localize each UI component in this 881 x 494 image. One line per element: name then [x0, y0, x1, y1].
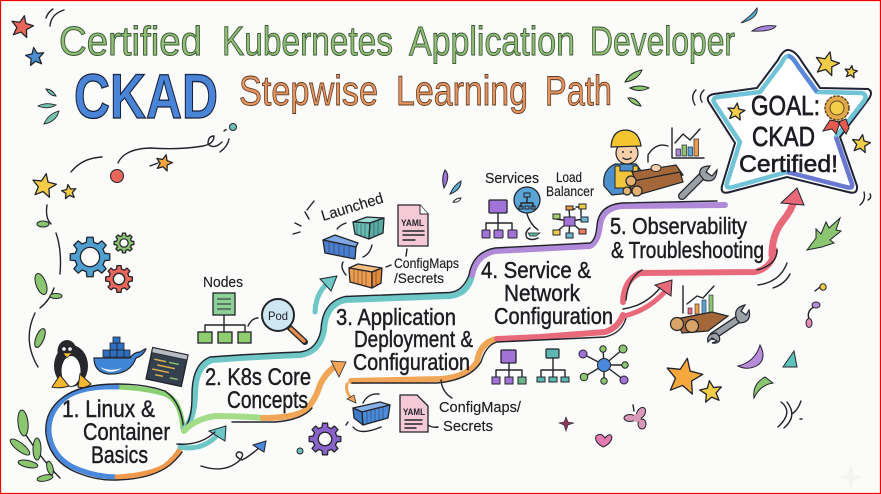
icon: hub network	[579, 345, 628, 384]
heading: stepwise learning path: Stepwise	[239, 67, 378, 114]
icon: pod magnifier: Pod	[268, 309, 288, 323]
step 4 label: Configuration	[494, 303, 613, 329]
step 1 label: 1. Linux &	[62, 396, 155, 423]
label: configmaps secrets	[386, 249, 459, 286]
goal star text	[739, 90, 838, 178]
lower wrench	[708, 305, 750, 343]
path: step 3 orange to step 4 red	[351, 250, 777, 383]
container bottom arrows	[346, 394, 381, 432]
icon: load balancer network	[553, 204, 588, 238]
path: step 1 linux and container basics loop	[46, 384, 184, 480]
icon: teal container	[353, 217, 384, 239]
label: load balancer	[546, 169, 594, 199]
title: certified kubernetes application developer	[59, 18, 735, 64]
title: certified kubernetes application developer: Kubernetes	[222, 18, 393, 64]
network icons step 4	[443, 169, 594, 240]
icon: yaml document	[398, 205, 428, 246]
decorations: top right	[625, 8, 872, 205]
label: load balancer: Balancer	[546, 183, 594, 199]
label: services: Services	[485, 170, 539, 187]
label: configmaps secrets: /Secrets	[394, 270, 444, 286]
lower icons: org charts and hub	[492, 345, 628, 384]
step 5 label: & Troubleshooting	[611, 237, 764, 263]
heading: stepwise learning path	[239, 67, 612, 114]
arrow: small blue squiggle	[201, 441, 266, 469]
step 2 label: Concepts	[227, 387, 308, 414]
title: certified kubernetes application developer: Developer	[590, 18, 735, 64]
step labels	[62, 213, 764, 469]
lower chart	[683, 286, 714, 314]
icon: purple gear	[297, 423, 341, 455]
icon: docker whale	[94, 337, 146, 374]
label: configmaps secrets bottom: Secrets	[443, 418, 493, 435]
lower logs	[670, 312, 728, 333]
icon: growth chart top	[648, 128, 704, 162]
icon: linux penguin	[52, 340, 91, 388]
launched containers cluster	[293, 190, 459, 288]
logs	[623, 165, 683, 196]
heading: stepwise learning path: Learning	[396, 67, 528, 114]
step 1 label	[62, 396, 170, 469]
container arrows	[337, 223, 372, 275]
heading: stepwise learning path: Path	[545, 67, 612, 114]
path: step 2 lower green and orange with arrow	[184, 361, 346, 431]
step 5 label: 5. Observability	[610, 213, 747, 239]
icon: orange arrow down	[347, 384, 356, 403]
icon: gears left	[70, 233, 134, 292]
label: configmaps secrets: ConfigMaps	[394, 255, 459, 271]
icon: blue bottom container	[353, 402, 390, 425]
icon: blue container	[323, 235, 358, 259]
step 4 label	[481, 257, 613, 329]
decorations: top left	[9, 9, 237, 367]
arrow: step 5 to goal	[772, 188, 804, 255]
title: certified kubernetes application developer: Application	[409, 18, 575, 64]
icon: orange container	[349, 264, 382, 288]
step 3 label: Deployment &	[354, 326, 473, 352]
worker hands	[651, 164, 661, 172]
step 3 label: 3. Application	[336, 304, 456, 330]
goal star text: GOAL:	[751, 90, 820, 121]
step 4 label: 4. Service &	[481, 257, 591, 283]
icon: nodes diagram: Nodes	[203, 274, 243, 291]
heading: CKAD: CKAD	[74, 62, 218, 132]
icon: nodes diagram	[198, 274, 251, 343]
goal star text: Certified!	[739, 151, 838, 178]
icon: wrench top	[682, 166, 717, 196]
goal star	[708, 50, 871, 193]
worker body	[604, 164, 642, 195]
step 1 label: Basics	[91, 442, 148, 469]
label: configmaps secrets bottom: ConfigMaps/	[439, 399, 522, 416]
icon: plant bottom left	[8, 410, 60, 483]
step 2 label	[205, 364, 311, 414]
arrow: step 4 to step 5	[623, 280, 672, 316]
step 3 label: Configuration	[353, 349, 470, 375]
icon: teal lower org chart	[537, 349, 569, 382]
decorations: bottom right	[559, 218, 864, 490]
icon: code window	[146, 348, 188, 386]
icon: yaml bottom document	[400, 395, 428, 432]
icon: purple org chart	[482, 200, 517, 238]
icon: pod magnifier	[248, 299, 305, 342]
bottom containers cluster	[346, 380, 522, 435]
step 3 label	[336, 304, 473, 375]
label: launched: Launched	[319, 190, 385, 225]
label: configmaps secrets bottom	[428, 380, 522, 435]
step 1 label: Container	[83, 419, 170, 446]
path: step 2 upper teal to step 3 and step 4	[184, 201, 725, 429]
icon: worker with logs	[604, 130, 683, 196]
icon: medal	[823, 96, 849, 134]
icon: logs chart wrench lower	[670, 286, 750, 343]
icon: blue service circle	[514, 187, 540, 240]
icon: yaml bottom document: YAML	[403, 407, 425, 418]
icon: goal star small star	[727, 102, 746, 120]
step 2 label: 2. K8s Core	[205, 364, 311, 391]
worker face	[616, 142, 638, 164]
icon: purple lower org chart	[492, 350, 526, 384]
decorations: drops	[443, 170, 461, 202]
arrow: teal curve to containers	[315, 276, 337, 312]
goal star text: CKAD	[752, 121, 815, 152]
label: load balancer: Load	[556, 169, 582, 185]
worker hat	[611, 130, 641, 147]
step 4 label: Network	[504, 280, 580, 306]
icon: yaml document: YAML	[401, 218, 424, 229]
step 5 label	[610, 213, 764, 263]
title: certified kubernetes application developer: Certified	[59, 18, 202, 64]
arrow: step 1 to step 2	[177, 426, 226, 448]
